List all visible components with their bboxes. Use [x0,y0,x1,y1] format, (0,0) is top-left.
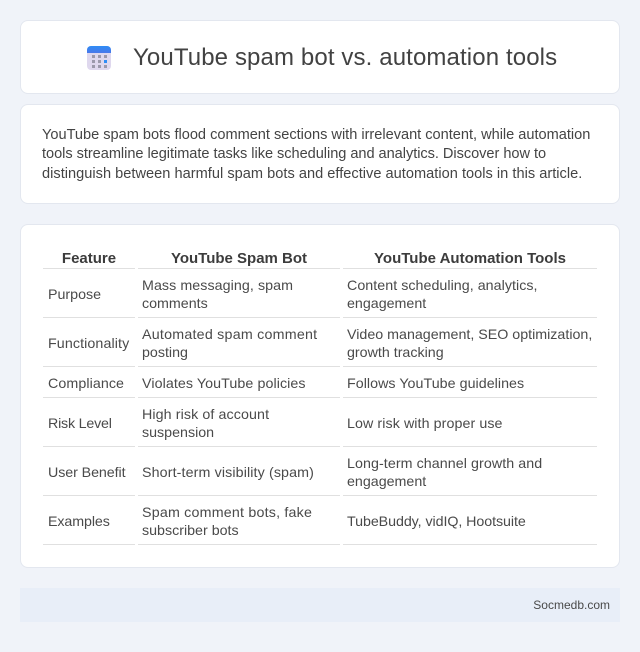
row: risk level: Low risk with proper use [347,416,503,432]
row: compliance: Violates YouTube policies [142,376,306,392]
intro text [42,126,590,182]
row: purpose: Purpose [48,287,101,303]
row: risk level: Risk Level [48,416,112,432]
row: purpose [48,278,538,312]
row: compliance: Compliance [48,376,124,392]
row: purpose: Content scheduling, analytics, [347,278,538,294]
row: examples: TubeBuddy, vidIQ, Hootsuite [347,514,526,530]
panel: title card [20,20,620,94]
row: compliance: Follows YouTube guidelines [347,376,524,392]
intro text: YouTube spam bots flood comment sections with irrelevant content, while automation [42,126,590,142]
table header [62,250,566,267]
row: functionality: Functionality [48,336,129,352]
row: user benefit: User Benefit [48,465,125,481]
row: examples [48,505,526,539]
row: examples: subscriber bots [142,523,239,539]
intro text: distinguish between harmful spam bots and effective automation tools in this article. [42,166,582,182]
row: user benefit: Long-term channel growth and [347,456,542,472]
table header: YouTube Automation Tools [374,250,566,267]
row: purpose: engagement [347,296,426,312]
footer text: Socmedb.com [533,598,610,612]
row: purpose: Mass messaging, spam [142,278,293,294]
footer bar [20,588,620,622]
panel: comparison table [20,224,620,568]
row: examples: Examples [48,514,110,530]
row: risk level: suspension [142,425,214,441]
row: functionality: posting [142,345,188,361]
row: risk level [48,407,503,441]
row: examples: Spam comment bots, fake [142,505,312,521]
row: functionality: growth tracking [347,345,444,361]
row: user benefit: Short-term visibility (spam) [142,465,314,481]
icon: calendar [87,46,111,70]
row: functionality: Video management, SEO optimization, [347,327,592,343]
row: functionality [48,327,592,361]
table header: YouTube Spam Bot [171,250,307,267]
row: functionality: Automated spam comment [142,327,317,343]
title: YouTube spam bot vs. automation tools [133,44,557,71]
row: risk level: High risk of account [142,407,269,423]
panel: introduction [20,104,620,204]
table header: Feature [62,250,116,267]
row: user benefit [48,456,542,490]
row: compliance [48,376,524,392]
intro text: tools streamline legitimate tasks like scheduling and analytics. Discover how to [42,146,546,162]
row: purpose: comments [142,296,208,312]
row: user benefit: engagement [347,474,426,490]
